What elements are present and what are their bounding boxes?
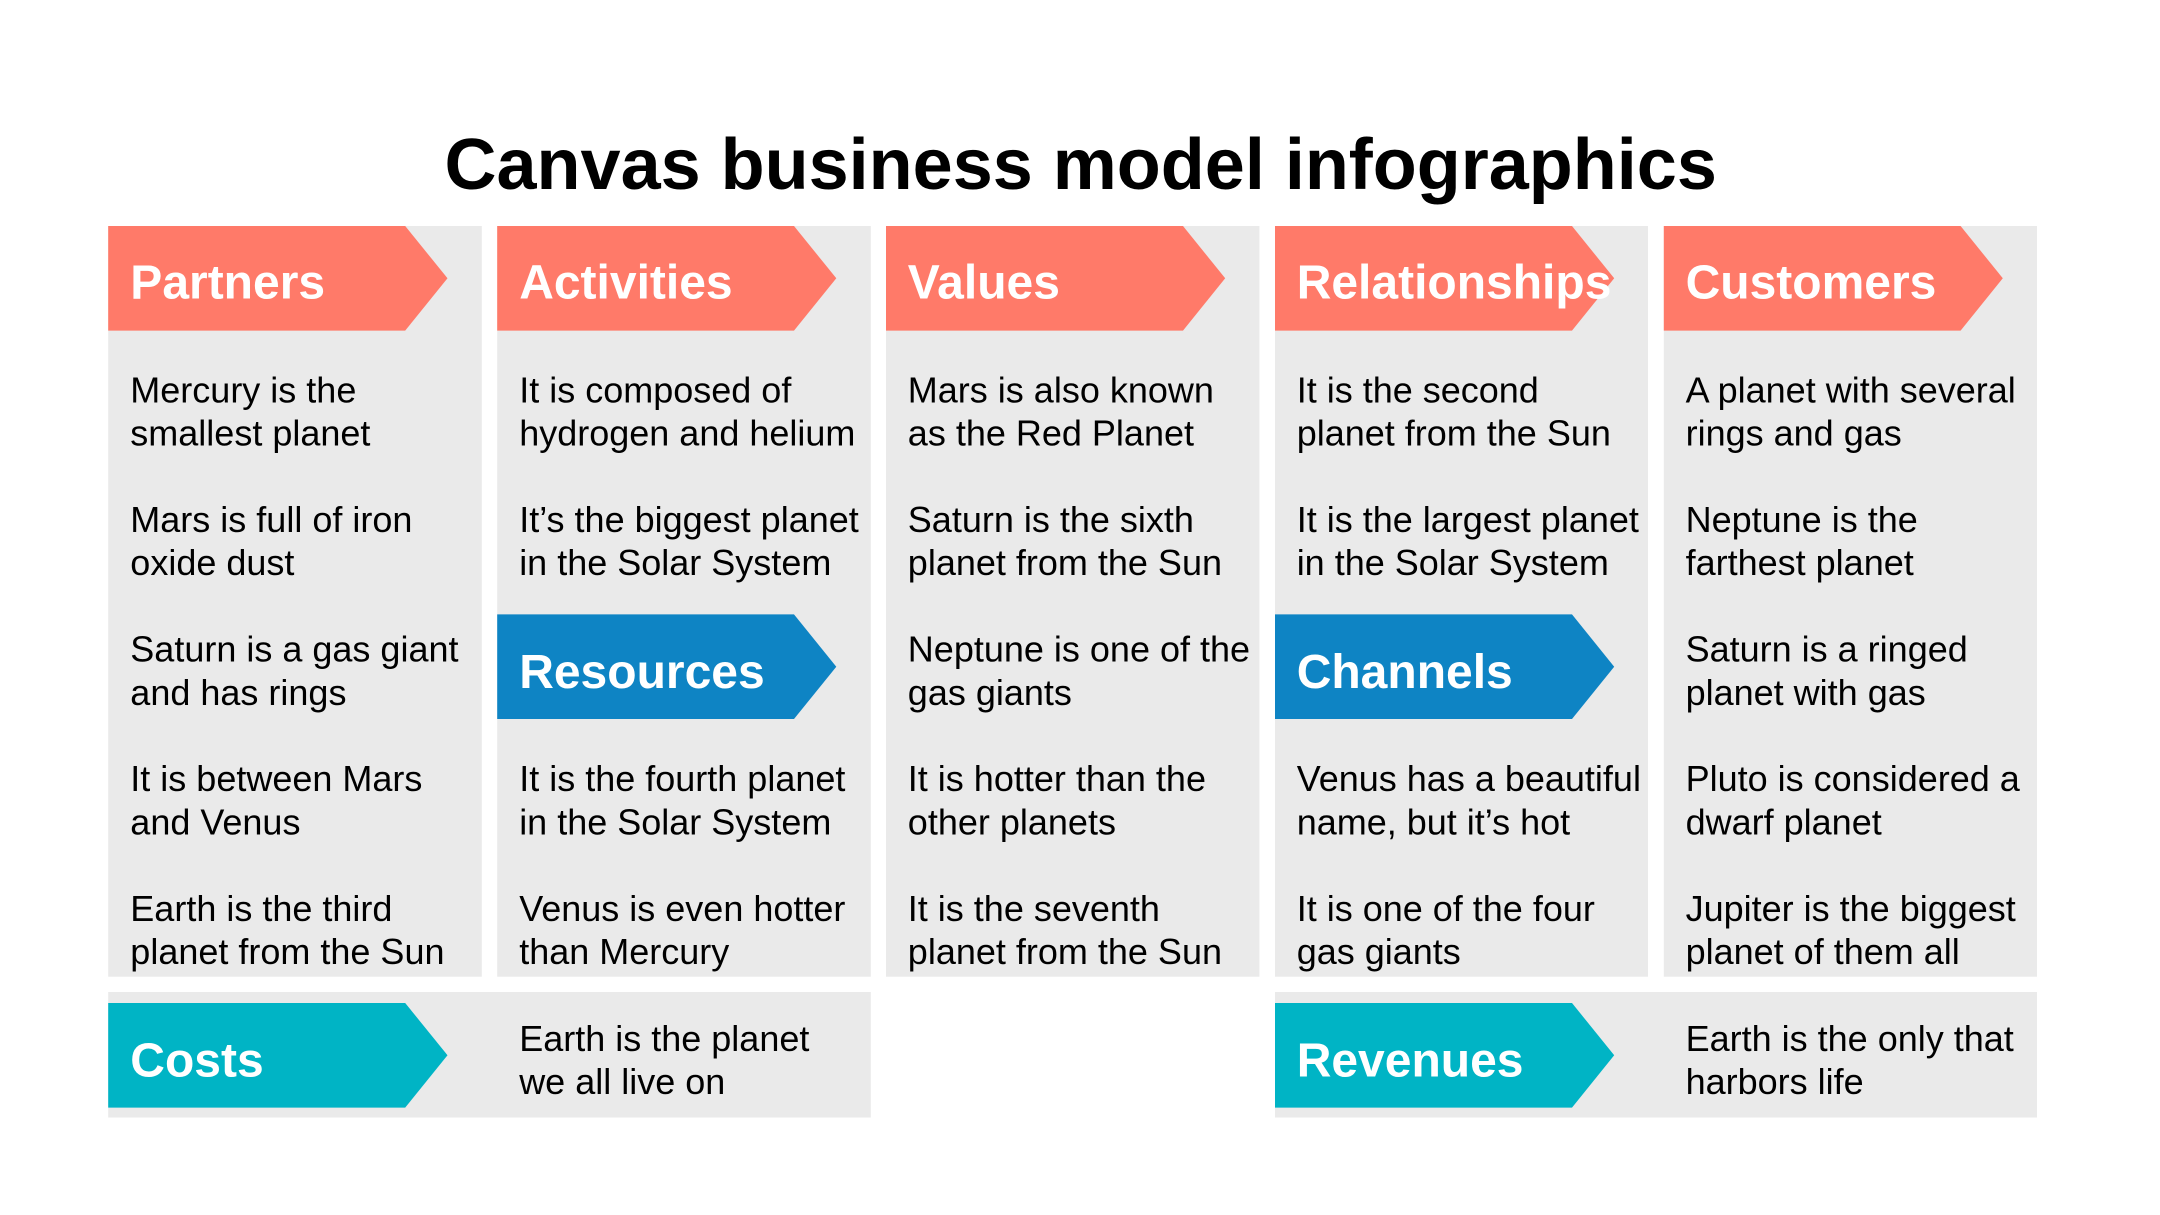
text: Relationships item 1: It is the second (1297, 369, 1539, 410)
text: Resources item 2: than Mercury (519, 931, 729, 972)
arrow header: Values: Values (908, 256, 1060, 310)
text: Relationships item 2: It is the largest planet (1297, 499, 1639, 540)
arrow header: Partners: Partners (130, 256, 325, 310)
text: Partners item 5: planet from the Sun (130, 931, 445, 972)
text: Channels item 2: gas giants (1297, 931, 1461, 972)
panel: Costs (108, 992, 871, 1118)
text: Partners item 1: Mercury is the (130, 369, 356, 410)
text: Activities item 1: hydrogen and helium (519, 413, 855, 454)
text: Costs description: we all live on (518, 1061, 725, 1102)
text: Values item 5: It is the seventh (908, 888, 1160, 929)
text: Resources item 2: Venus is even hotter (519, 888, 845, 929)
arrow header: Values (886, 226, 1225, 331)
arrow header: Activities: Activities (519, 256, 733, 310)
arrow header: Costs: Costs (130, 1035, 264, 1088)
text: Relationships item 2: in the Solar System (1297, 542, 1609, 583)
text: Channels item 2: It is one of the four (1297, 888, 1595, 929)
text: Values item 1: as the Red Planet (908, 413, 1194, 454)
panel: Customers (1664, 226, 2037, 977)
text: Customers item 2: farthest planet (1686, 542, 1914, 583)
text: Customers item 3: Saturn is a ringed (1686, 629, 1968, 670)
text: Partners item 1: smallest planet (130, 413, 370, 454)
text: Customers item 1: rings and gas (1686, 413, 1902, 454)
text: Values item 5: planet from the Sun (908, 931, 1222, 972)
text: Values item 3: Neptune is one of the (908, 629, 1250, 670)
text: Customers item 1: A planet with several (1686, 369, 2016, 410)
text: Activities item 1: It is composed of (519, 369, 792, 410)
arrow header: Relationships: Relationships (1297, 256, 1611, 310)
text: Partners item 4: and Venus (130, 802, 300, 842)
text: Revenues description: harbors life (1686, 1061, 1864, 1102)
text: Partners item 4: It is between Mars (130, 758, 422, 799)
panel: Partners (108, 226, 482, 977)
text: Customers item 4: Pluto is considered a (1686, 758, 2021, 799)
text: Revenues description: Earth is the only that (1686, 1018, 2014, 1059)
text: Partners item 2: Mars is full of iron (130, 499, 412, 540)
arrow header: Channels: Channels (1297, 646, 1513, 699)
text: Relationships item 1: planet from the Sun (1297, 413, 1611, 454)
text: Values item 3: gas giants (908, 672, 1072, 713)
text: Customers item 2: Neptune is the (1686, 499, 1918, 540)
arrow header: Partners (108, 226, 447, 331)
panel: Relationships and Channels (1275, 226, 1648, 977)
text: Channels item 1: name, but it’s hot (1297, 802, 1570, 842)
text: Channels item 1: Venus has a beautiful (1297, 758, 1641, 799)
panel: Revenues (1275, 992, 2037, 1118)
text: Resources item 1: It is the fourth planet (519, 758, 845, 799)
arrow header: Customers (1664, 226, 2003, 331)
arrow header: Customers: Customers (1686, 256, 1936, 310)
arrow header: Revenues (1275, 1003, 1614, 1108)
text: Customers item 4: dwarf planet (1686, 802, 1882, 842)
arrow header: Activities (497, 226, 836, 331)
text: Values item 2: planet from the Sun (908, 542, 1222, 583)
arrow header: Costs (108, 1003, 447, 1108)
text: Customers item 3: planet with gas (1686, 672, 1926, 713)
text: Values item 4: other planets (908, 802, 1116, 842)
text: Activities item 2: in the Solar System (519, 542, 831, 583)
text: Resources item 1: in the Solar System (519, 802, 831, 842)
text: Costs description: Earth is the planet (519, 1018, 809, 1059)
arrow header: Channels (1275, 614, 1614, 719)
text: Customers item 5: Jupiter is the biggest (1686, 888, 2016, 929)
text: Partners item 3: and has rings (130, 672, 346, 713)
text: Values item 4: It is hotter than the (908, 758, 1206, 799)
arrow header: Resources (497, 614, 836, 719)
text: Partners item 2: oxide dust (130, 542, 294, 583)
text: Values item 1: Mars is also known (908, 369, 1214, 410)
text: Values item 2: Saturn is the sixth (908, 499, 1194, 540)
panel: Activities and Resources (497, 226, 871, 977)
text: Customers item 5: planet of them all (1686, 931, 1960, 972)
text: Partners item 3: Saturn is a gas giant (130, 629, 459, 670)
arrow header: Revenues: Revenues (1297, 1035, 1523, 1088)
arrow header: Relationships (1275, 226, 1614, 331)
text: Activities item 2: It’s the biggest planet (519, 499, 859, 540)
text: Partners item 5: Earth is the third (130, 888, 392, 929)
panel: Values (886, 226, 1259, 977)
arrow header: Resources: Resources (519, 646, 765, 699)
title: Canvas business model infographics (445, 125, 1717, 205)
